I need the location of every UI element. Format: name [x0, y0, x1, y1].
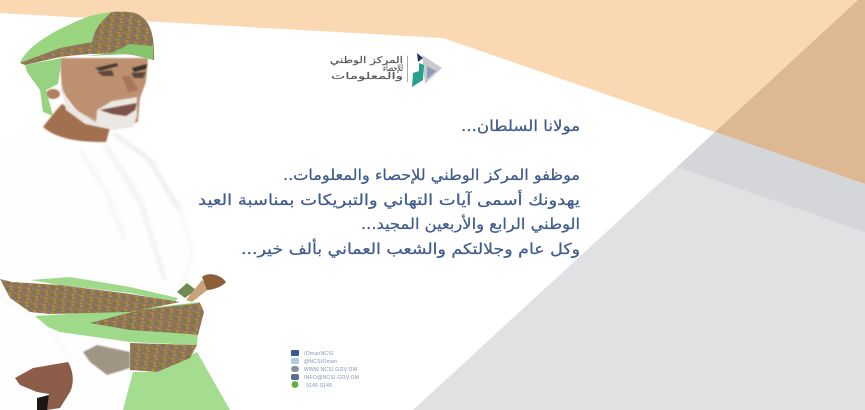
pouch [83, 345, 130, 375]
dagger handle [177, 274, 226, 302]
logo [330, 53, 442, 87]
contact: twitter: @NCSIOman [304, 359, 337, 365]
logo text: المركز الوطني [330, 56, 403, 66]
contact: whatsapp: 9145 9145 [306, 383, 332, 389]
mouth [100, 103, 137, 116]
message text: مولانا السلطان... [461, 117, 580, 135]
logo text: والمعلومات [331, 72, 403, 82]
message text: وكل عام وجلالتكم والشعب العماني بألف خير... [241, 238, 580, 259]
contact list [291, 350, 359, 389]
hand and cane [15, 362, 73, 410]
turban [20, 12, 154, 116]
face [60, 58, 148, 128]
message text: يهدونك أسمى آيات التهاني والتبريكات بمناسبة العيد [198, 190, 580, 210]
sash [0, 277, 230, 410]
message text: الوطني الرابع والأربعين المجيد... [361, 214, 580, 234]
logo text: للإحصاء [383, 64, 403, 74]
logo text [330, 56, 403, 82]
contact: facebook: /OmanNCSI [304, 351, 334, 357]
facial features [95, 63, 147, 92]
message text [198, 117, 580, 259]
robe [0, 125, 228, 410]
contact: website: WWW.NCSI.GOV.OM [304, 367, 357, 373]
message text: موظفو المركز الوطني للإحصاء والمعلومات.. [283, 166, 580, 185]
portrait figure [0, 12, 230, 410]
ear [46, 89, 60, 99]
beard [60, 82, 137, 130]
logo mark [407, 53, 442, 87]
contact: email: INFO@NCSI.GOV.OM [304, 375, 359, 381]
neck [43, 104, 110, 142]
